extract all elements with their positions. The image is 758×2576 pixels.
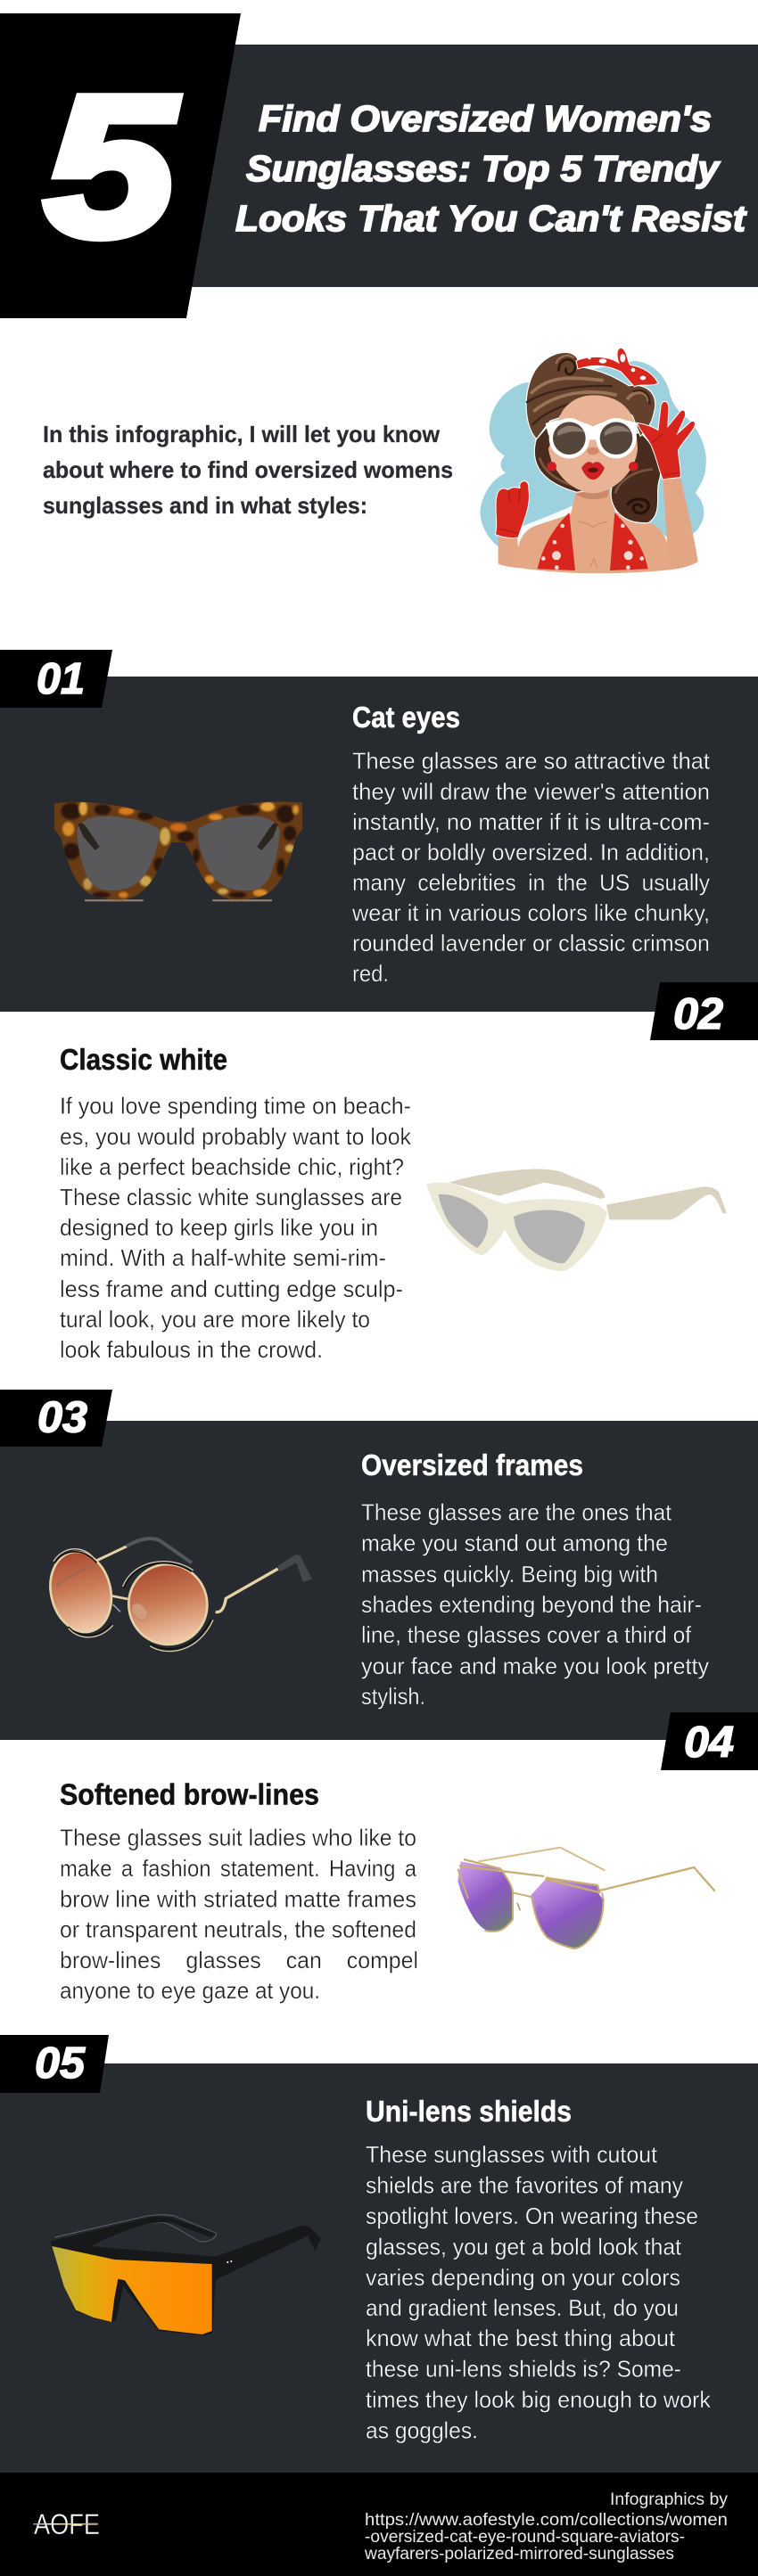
header: [0, 13, 758, 318]
credit text: -oversized-cat-eye-round-square-aviators-: [365, 2527, 685, 2547]
intro text: In this infographic, I will let you know: [43, 421, 441, 447]
body text: look fabulous in the crowd.: [60, 1336, 323, 1363]
badge 03: [0, 1390, 112, 1447]
image: round gradient sunglasses: [42, 1538, 312, 1653]
body text: instantly, no matter if it is ultra-com-: [352, 808, 710, 835]
body text: red.: [352, 960, 389, 987]
body text: shades extending beyond the hair-: [361, 1591, 702, 1618]
image: cream cat-eye sunglasses: [426, 1169, 727, 1271]
body text: spotlight lovers. On wearing these: [366, 2203, 698, 2229]
body text: [366, 2141, 712, 2444]
body text: as goggles.: [366, 2417, 478, 2444]
panel background: [0, 2063, 758, 2473]
title: Find Oversized Women's: [259, 98, 712, 139]
credit text: https://www.aofestyle.com/collections/women: [365, 2510, 728, 2530]
heading: Uni-lens shields: Uni-lens shields: [366, 2095, 572, 2128]
body text: brow line with striated matte frames: [60, 1886, 416, 1913]
body text: glasses, you get a bold look that: [366, 2234, 682, 2260]
badge 05: 05: [35, 2039, 86, 2088]
panel: uni-lens shields: [0, 2035, 758, 2473]
logo: AOFE: AOFE: [34, 2508, 100, 2540]
image: tortoise cat-eye sunglasses: [51, 796, 306, 903]
body text: anyone to eye gaze at you.: [60, 1977, 320, 2004]
badge 04: [661, 1712, 758, 1770]
panel: classic white: [60, 982, 758, 1363]
badge 01: 01: [37, 655, 85, 703]
body text: times they look big enough to work: [366, 2386, 712, 2413]
image: purple mirrored cat-eye sunglasses: [457, 1848, 715, 1948]
body text: rounded lavender or classic crimson: [352, 930, 710, 956]
intro text: about where to find oversized womens: [43, 456, 453, 483]
heading: Cat eyes: Cat eyes: [352, 701, 460, 734]
body text: These glasses are so attractive that: [352, 747, 711, 774]
body text: These glasses suit ladies who like to: [60, 1824, 416, 1850]
badge 02: 02: [673, 990, 723, 1038]
header black block: [0, 13, 241, 318]
intro text: sunglasses and in what styles:: [43, 492, 367, 519]
heading: Oversized frames: Oversized frames: [361, 1448, 583, 1481]
panel background: [0, 677, 758, 1012]
credit text: [364, 2490, 728, 2564]
body text: designed to keep girls like you in: [60, 1214, 378, 1241]
title: Looks That You Can't Resist: [235, 198, 747, 239]
body text: like a perfect beachside chic, right?: [60, 1153, 404, 1180]
body text: tural look, you are more likely to: [60, 1306, 370, 1333]
footer: [0, 2473, 758, 2576]
body text: brow-lines glasses can compel: [60, 1947, 418, 1973]
heading: Classic white: Classic white: [60, 1043, 227, 1076]
body text: [361, 1499, 709, 1710]
body text: make a fashion statement. Having a: [60, 1855, 416, 1882]
body text: and gradient lenses. But, do you: [366, 2294, 679, 2321]
body text: pact or boldly oversized. In addition,: [352, 839, 710, 866]
footer background: [0, 2473, 758, 2576]
heading: Softened brow-lines: Softened brow-lines: [60, 1777, 319, 1811]
badge 02: [650, 982, 758, 1040]
body text: shields are the favorites of many: [366, 2171, 683, 2198]
intro text: [43, 421, 453, 519]
credit text: Infographics by: [610, 2490, 728, 2509]
body text: your face and make you look pretty: [361, 1653, 709, 1679]
panel background: [0, 1421, 758, 1740]
body text: These glasses are the ones that: [361, 1499, 672, 1526]
body text: If you love spending time on beach-: [60, 1093, 411, 1120]
body text: [351, 747, 711, 987]
panel: oversized frames: [0, 1390, 758, 1740]
body text: [60, 1093, 412, 1363]
image: orange shield sunglasses: [51, 2215, 321, 2335]
illustration: woman in sunglasses: [481, 349, 706, 573]
big number 5: 5: [45, 53, 177, 278]
body text: make you stand out among the: [361, 1530, 668, 1556]
header dark band: [0, 45, 758, 287]
body text: wear it in various colors like chunky,: [351, 899, 710, 926]
panel: cat eyes: [0, 650, 758, 1012]
body text: mind. With a half-white semi-rim-: [60, 1244, 386, 1271]
body text: [60, 1824, 418, 2004]
title: Sunglasses: Top 5 Trendy: [246, 148, 721, 189]
body text: line, these glasses cover a third of: [361, 1621, 692, 1648]
badge 01: [0, 650, 112, 708]
credit text: wayfarers-polarized-mirrored-sunglasses: [364, 2544, 674, 2564]
body text: varies depending on your colors: [366, 2264, 680, 2291]
body text: These classic white sunglasses are: [60, 1184, 402, 1210]
body text: es, you would probably want to look: [60, 1123, 412, 1150]
badge 04: 04: [684, 1719, 734, 1767]
body text: less frame and cutting edge sculp-: [60, 1276, 403, 1302]
panel: softened brow-lines: [60, 1712, 758, 2004]
body text: many celebrities in the US usually: [352, 869, 710, 896]
body text: or transparent neutrals, the softened: [60, 1916, 416, 1943]
title: [235, 98, 747, 239]
body text: know what the best thing about: [366, 2325, 676, 2351]
body text: stylish.: [361, 1683, 425, 1710]
badge 03: 03: [37, 1394, 87, 1442]
body text: these uni-lens shields is? Some-: [366, 2355, 681, 2382]
body text: These sunglasses with cutout: [366, 2141, 658, 2168]
body text: masses quickly. Being big with: [361, 1561, 658, 1587]
body text: they will draw the viewer's attention: [352, 778, 710, 805]
badge 05: [0, 2035, 109, 2093]
